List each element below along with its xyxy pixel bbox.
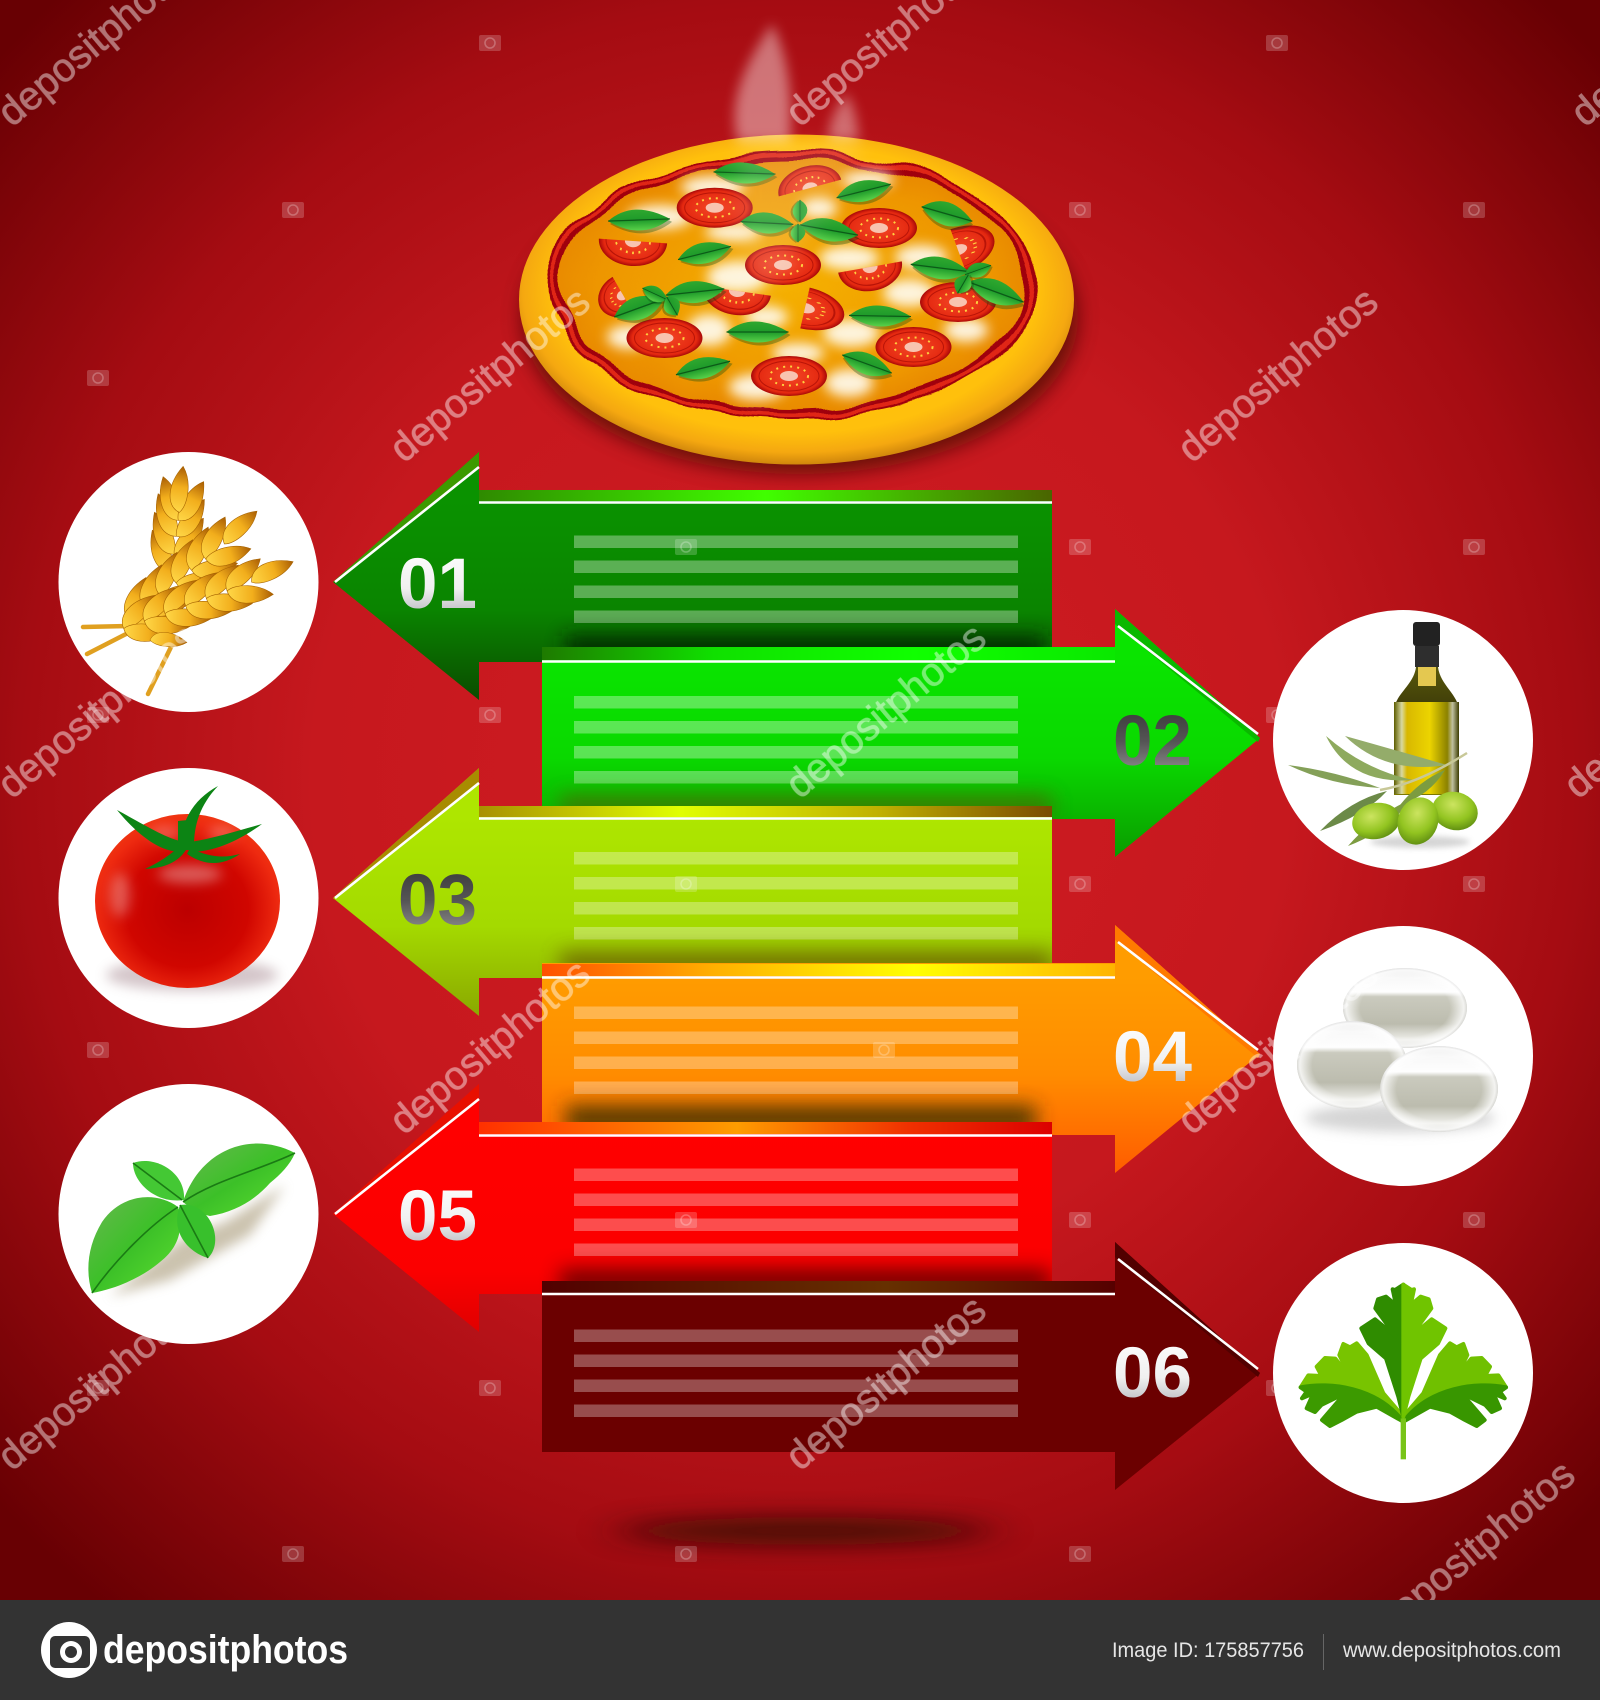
number 03: 03 [398,861,477,940]
cast shadow [560,796,1052,818]
head edge [333,768,479,898]
head edge [1115,1242,1260,1377]
shadow [1305,1104,1495,1132]
small leaf top [133,1161,184,1200]
logo mark [41,1622,97,1678]
cast shadow [565,636,1045,660]
arrow body [542,1242,1260,1490]
circle [1273,1243,1533,1503]
circle [1273,610,1533,870]
arrow body [333,768,1052,1016]
stems [83,626,172,694]
ear 2 [106,491,279,648]
small leaf bottom [177,1205,215,1258]
number 06: 06 [1113,1334,1192,1413]
arrow 02 [542,609,1260,857]
icon: parsley [1273,1243,1533,1503]
pizza shadow [522,162,1078,474]
icon: mozzarella [1273,926,1533,1186]
top band [479,490,1052,501]
circle [58,1084,318,1344]
website: www.depositphotos.com [1342,1639,1561,1662]
highlight lines [542,626,1258,734]
arrow body [542,925,1260,1173]
highlight lines [335,467,1052,582]
top band [479,806,1052,817]
head edge [333,452,479,582]
highlights [110,827,236,917]
pizza illustration [519,24,1078,474]
text placeholder lines [574,536,1018,623]
text watermarks: depositphotos [778,615,994,807]
text watermarks: depositphotos [382,951,598,1143]
fruit [95,814,280,988]
number 05: 05 [398,1177,477,1256]
circle [58,768,318,1028]
number 02: 02 [1113,702,1192,781]
circle [58,452,318,712]
highlight lines [542,1259,1258,1369]
text placeholder lines [574,1330,1018,1417]
ear 3 [110,540,304,656]
text watermarks: depositphotos [1170,279,1386,471]
top band [479,1122,1052,1134]
leaf [1301,1285,1506,1459]
shadow [106,959,278,991]
ball back [1343,968,1467,1048]
top band [542,647,1115,660]
text watermarks: depositphotos [778,1287,994,1479]
highlight lines [542,942,1258,1050]
icon: tomato [58,768,318,1028]
highlight lines [335,783,1052,898]
cast shadow [566,1106,1036,1132]
olive leaves [1288,736,1467,846]
large leaf right [183,1144,295,1216]
ear base cluster [149,630,188,650]
head edge [1115,609,1260,742]
text placeholder lines [574,852,1018,940]
steam [735,24,860,300]
bottle [1394,622,1459,795]
text placeholder lines [574,1168,1018,1256]
ball right [1380,1046,1498,1132]
arrow 04 [542,925,1260,1173]
logo wordmark: depositphotos [103,1628,348,1672]
text placeholder lines [574,696,1018,784]
text watermarks: depositphotos [1367,1452,1583,1644]
divider [1323,1634,1324,1670]
melted mozzarella patches [607,171,988,400]
highlight lines [335,1099,1052,1214]
arrow 01 [333,452,1052,700]
large leaf left [88,1197,180,1293]
top band [542,1281,1115,1293]
cast shadow [560,952,1052,976]
cast shadow [560,1270,1050,1292]
arrow 05 [333,1084,1052,1332]
tomato slices [590,158,1001,396]
basil leaves [608,161,1029,388]
circle [1273,926,1533,1186]
text placeholder lines [574,1006,1018,1094]
number 04: 04 [1113,1018,1192,1097]
head edge [333,1084,479,1214]
leaf veins [92,1153,295,1293]
icon: basil [58,1084,318,1344]
text watermarks: depositphotos [1170,951,1386,1143]
arrow body [333,1084,1052,1332]
shadow [110,1185,285,1296]
top band [542,964,1115,976]
olives [1349,787,1482,850]
text watermarks: depositphotos [382,279,598,471]
image id: Image ID: 175857756 [1112,1639,1304,1662]
arrow body [333,452,1052,700]
arrow body [542,609,1260,857]
floor shadow [615,1517,995,1545]
sauce ring and cheese base [547,151,1039,419]
number 01: 01 [398,545,477,624]
arrow 06 [542,1242,1260,1490]
ball left [1297,1021,1407,1109]
head edge [1115,925,1260,1058]
crust [519,134,1074,464]
ear 1 [140,462,216,581]
calyx [117,786,262,869]
arrow 03 [333,768,1052,1016]
camera watermarks [87,35,1485,1562]
icon: olive oil [1273,610,1533,870]
footer bar [0,1600,1600,1700]
icon: wheat [58,452,318,712]
